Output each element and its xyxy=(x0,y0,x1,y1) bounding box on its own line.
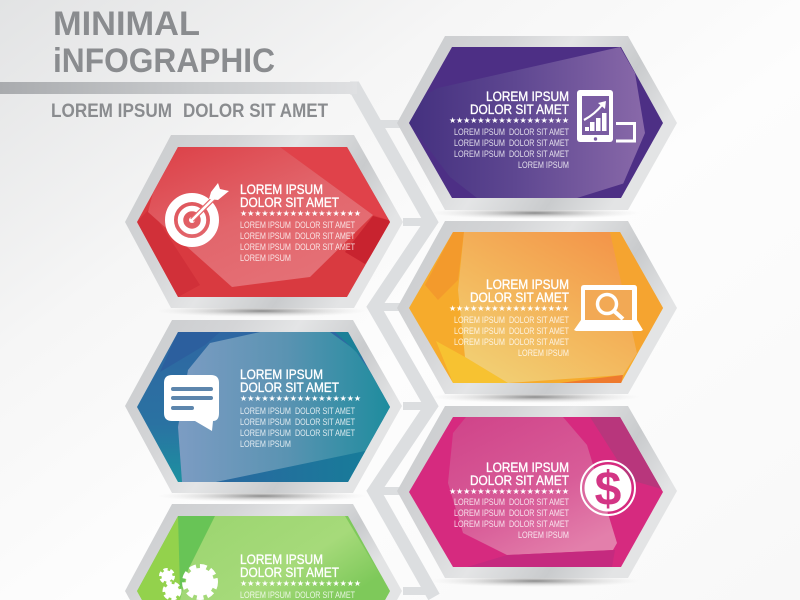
text: blue panel: LOREM IPSUM xyxy=(240,439,291,449)
text: blue panel: DOLOR SIT AMET xyxy=(240,380,339,395)
text: pink panel: LOREM IPSUM xyxy=(454,519,505,529)
text: blue panel: LOREM IPSUM xyxy=(240,367,323,382)
text: pink panel: DOLOR SIT AMET xyxy=(509,519,570,529)
text: pink panel: LOREM IPSUM xyxy=(486,460,569,475)
text: pink panel: LOREM IPSUM xyxy=(518,530,569,540)
icon: speech bubble xyxy=(164,375,219,431)
subtitle: DOLOR SIT AMET xyxy=(183,101,328,122)
text: pink panel: DOLOR SIT AMET xyxy=(470,473,569,488)
text: red panel: DOLOR SIT AMET xyxy=(295,231,356,241)
text: purple panel: LOREM IPSUM xyxy=(454,149,505,159)
text: blue panel: LOREM IPSUM xyxy=(240,428,291,438)
text: pink panel: ★★★★★★★★★★★★★★★★★ xyxy=(449,487,569,496)
title xyxy=(53,5,275,80)
text: blue panel: LOREM IPSUM xyxy=(240,417,291,427)
text: orange panel: DOLOR SIT AMET xyxy=(509,337,570,347)
text: pink panel: DOLOR SIT AMET xyxy=(509,497,570,507)
panel: blue speech xyxy=(125,320,402,493)
text: red panel: LOREM IPSUM xyxy=(240,182,323,197)
text: red panel: LOREM IPSUM xyxy=(240,220,291,230)
text: purple panel: DOLOR SIT AMET xyxy=(470,102,569,117)
text: blue panel: LOREM IPSUM xyxy=(240,406,291,416)
text: purple panel: LOREM IPSUM xyxy=(486,89,569,104)
header bar xyxy=(0,82,357,94)
text: green panel: ★★★★★★★★★★★★★★★★★ xyxy=(240,579,361,588)
panel: red target xyxy=(125,135,403,308)
drop shadows under hexagons xyxy=(157,207,640,587)
text: pink panel: LOREM IPSUM xyxy=(454,508,505,518)
text: blue panel: ★★★★★★★★★★★★★★★★★ xyxy=(240,394,361,403)
text: green panel: LOREM IPSUM xyxy=(240,590,291,600)
text: red panel: DOLOR SIT AMET xyxy=(295,242,356,252)
panel: pink dollar xyxy=(397,406,677,578)
text: orange panel: DOLOR SIT AMET xyxy=(509,315,570,325)
title: MINIMAL xyxy=(53,5,200,43)
text: orange panel: LOREM IPSUM xyxy=(454,326,505,336)
panel: purple tablet xyxy=(397,36,677,210)
panel: orange laptop xyxy=(397,221,677,394)
icon: laptop with magnifier xyxy=(574,285,643,331)
text: green panel: DOLOR SIT AMET xyxy=(240,565,339,580)
text: purple panel: DOLOR SIT AMET xyxy=(509,149,570,159)
text: red panel: LOREM IPSUM xyxy=(240,253,291,263)
text: purple panel: DOLOR SIT AMET xyxy=(509,138,570,148)
text: blue panel: DOLOR SIT AMET xyxy=(295,406,356,416)
title: iNFOGRAPHIC xyxy=(53,42,275,80)
subtitle: LOREM IPSUM xyxy=(51,101,172,122)
text: green panel: DOLOR SIT AMET xyxy=(295,590,356,600)
text: purple panel: DOLOR SIT AMET xyxy=(509,127,570,137)
text: pink panel xyxy=(449,460,570,540)
panel: green gears xyxy=(125,504,402,600)
text: red panel: DOLOR SIT AMET xyxy=(240,195,339,210)
text: orange panel: LOREM IPSUM xyxy=(454,337,505,347)
connector network xyxy=(350,88,434,597)
text: orange panel: LOREM IPSUM xyxy=(518,348,569,358)
text: blue panel xyxy=(240,367,361,449)
text: orange panel: ★★★★★★★★★★★★★★★★★ xyxy=(449,304,569,313)
text: red panel: ★★★★★★★★★★★★★★★★★ xyxy=(240,209,361,218)
text: orange panel: DOLOR SIT AMET xyxy=(470,290,569,305)
text: orange panel: LOREM IPSUM xyxy=(486,277,569,292)
icon: dollar coin: $ xyxy=(595,463,622,516)
icon: dollar coin xyxy=(581,461,635,516)
text: orange panel: LOREM IPSUM xyxy=(454,315,505,325)
text: blue panel: DOLOR SIT AMET xyxy=(295,428,356,438)
text: pink panel: LOREM IPSUM xyxy=(454,497,505,507)
text: purple panel: ★★★★★★★★★★★★★★★★★ xyxy=(449,116,569,125)
text: purple panel: LOREM IPSUM xyxy=(454,138,505,148)
text: green panel: LOREM IPSUM xyxy=(240,552,323,567)
icon: target xyxy=(170,183,229,242)
text: purple panel xyxy=(449,89,570,170)
text: blue panel: DOLOR SIT AMET xyxy=(295,417,356,427)
text: red panel xyxy=(240,182,361,263)
text: red panel: DOLOR SIT AMET xyxy=(295,220,356,230)
text: red panel: LOREM IPSUM xyxy=(240,242,291,252)
text: orange panel: DOLOR SIT AMET xyxy=(509,326,570,336)
text: red panel: LOREM IPSUM xyxy=(240,231,291,241)
text: purple panel: LOREM IPSUM xyxy=(454,127,505,137)
icon: tablet with chart xyxy=(577,90,634,142)
text: pink panel: DOLOR SIT AMET xyxy=(509,508,570,518)
subtitle xyxy=(51,101,328,122)
text: purple panel: LOREM IPSUM xyxy=(518,160,569,170)
text: green panel xyxy=(240,552,361,600)
text: orange panel xyxy=(449,277,570,358)
icon: gears xyxy=(162,568,214,598)
